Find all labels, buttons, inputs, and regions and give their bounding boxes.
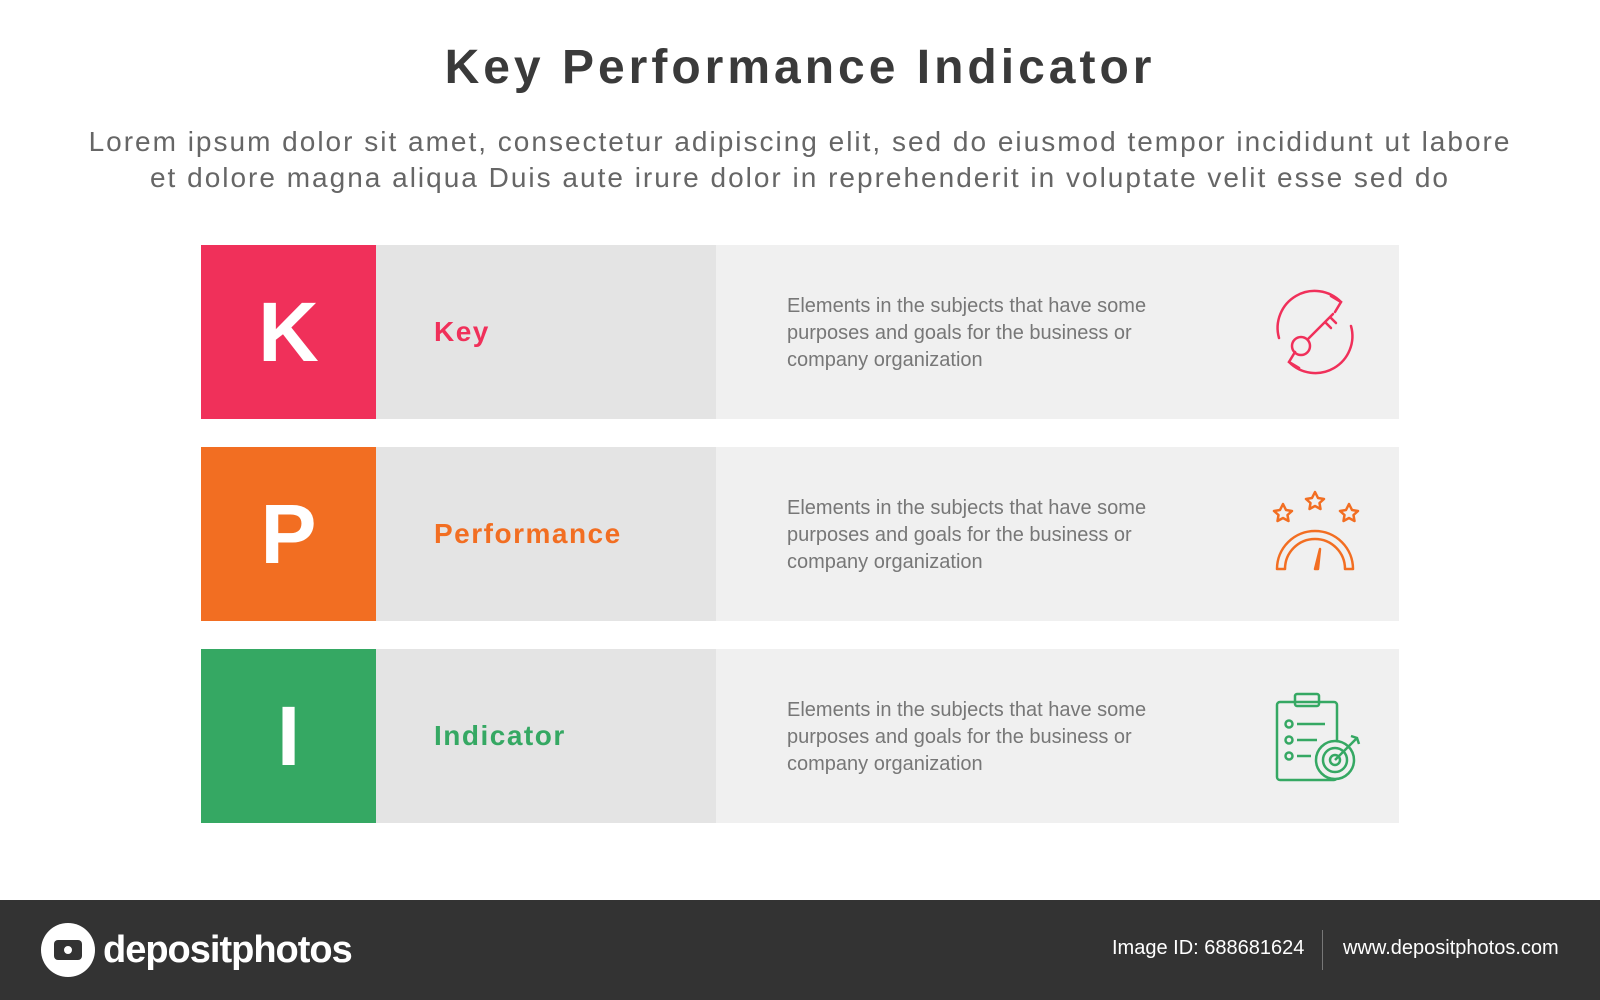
label: Indicator: Indicator <box>434 720 566 751</box>
letter P: P <box>260 487 317 581</box>
title: Key Performance Indicator <box>445 41 1155 94</box>
icon: key cycle <box>1276 290 1354 374</box>
panel: key row <box>201 245 1399 419</box>
letter K: K <box>258 285 319 379</box>
footer bar <box>0 900 1600 1000</box>
panel: indicator row <box>201 649 1399 823</box>
letter I <box>201 649 376 823</box>
panel: performance row <box>201 447 1399 621</box>
icon: clipboard target <box>1276 692 1360 782</box>
footer url: www.depositphotos.com <box>1343 937 1559 959</box>
footer image id: Image ID: 688681624 <box>1112 937 1304 959</box>
description: Elements in the subjects that have some purposes and goals for the business or company organization <box>787 699 1146 775</box>
footer logo: depositphotos <box>103 928 352 970</box>
subtitle: Lorem ipsum dolor sit amet, consectetur adipiscing elit, sed do eiusmod tempor incididunt ut labore <box>89 126 1511 157</box>
letter K <box>201 245 376 419</box>
letter P <box>201 447 376 621</box>
description: Elements in the subjects that have some purposes and goals for the business or company organization <box>787 295 1146 371</box>
icon: gauge with stars <box>1272 490 1360 570</box>
subtitle: et dolore magna aliqua Duis aute irure dolor in reprehenderit in voluptate velit esse sed do <box>150 162 1450 193</box>
letter I: I <box>277 689 300 783</box>
description: Elements in the subjects that have some purposes and goals for the business or company organization <box>787 497 1146 573</box>
label: Performance: Performance <box>434 518 622 549</box>
label: Key: Key <box>434 316 490 347</box>
footer logo <box>41 923 352 977</box>
subtitle <box>89 126 1511 193</box>
